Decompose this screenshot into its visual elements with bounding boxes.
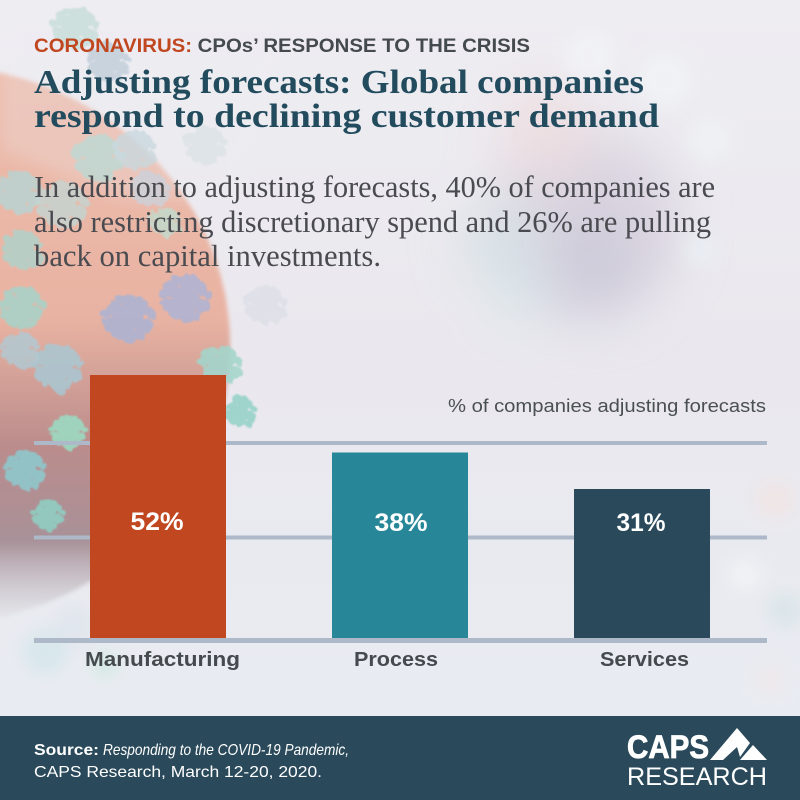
- logo: CAPS Research: [627, 728, 767, 791]
- source note: Responding to the COVID-19 Pandemic,: [103, 742, 349, 759]
- bar: services: [574, 489, 710, 638]
- axis labels: [85, 649, 689, 671]
- title: respond to declining customer demand: [34, 98, 659, 135]
- bar: services: 31%: [616, 509, 666, 537]
- source note: [34, 742, 349, 781]
- intro paragraph: also restricting discretionary spend and 26% are pulling: [34, 204, 711, 239]
- main virus body: [0, 65, 230, 625]
- logo: CAPS Research: CAPS: [627, 729, 709, 765]
- pale haze over virus body: [0, 0, 300, 200]
- intro paragraph: [34, 169, 715, 273]
- title: [34, 64, 659, 135]
- logo: CAPS Research: RESEARCH: [627, 763, 767, 791]
- source note: CAPS Research, March 12-20, 2020.: [34, 764, 322, 781]
- source note: Source:: [34, 742, 99, 759]
- bar: process: 38%: [374, 509, 428, 537]
- intro paragraph: In addition to adjusting forecasts, 40% of companies are: [34, 169, 715, 204]
- icon: mountain: [710, 728, 767, 760]
- axis labels: Services: [600, 649, 689, 671]
- virus spike clusters: [0, 6, 288, 531]
- bar chart: [34, 375, 767, 671]
- blurred virus at lower right: [729, 480, 800, 696]
- intro paragraph: back on capital investments.: [34, 238, 381, 273]
- bar: process: [332, 452, 468, 638]
- blurred glow lower left: [23, 605, 117, 677]
- eyebrow heading: CORONAVIRUS: CPOs’ RESPONSE TO THE CRISIS: [34, 35, 530, 57]
- bar: manufacturing: 52%: [130, 508, 184, 536]
- footer band: [0, 716, 800, 800]
- title: Adjusting forecasts: Global companies: [34, 64, 644, 101]
- bar: manufacturing: [90, 375, 226, 638]
- axis labels: Manufacturing: [85, 649, 240, 671]
- chart caption: % of companies adjusting forecasts: [448, 396, 766, 416]
- blurred virus at right: [460, 85, 680, 328]
- axis labels: Process: [354, 649, 438, 671]
